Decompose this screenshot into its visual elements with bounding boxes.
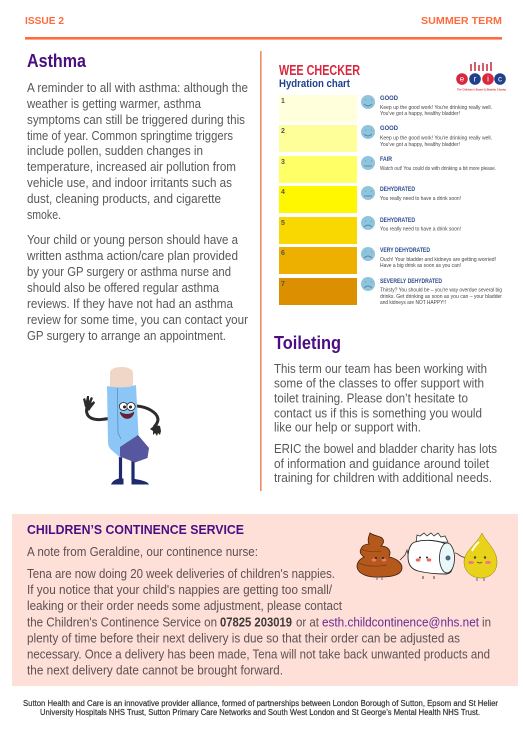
chart row 5: DEHYDRATED	[380, 217, 415, 224]
text block: toileting support: some of the classes to offer support with	[274, 376, 484, 390]
text block: tena deliveries: in	[482, 616, 491, 630]
chart row 1: You've got a happy, healthy bladder!	[380, 111, 460, 117]
text block: eric charity	[274, 442, 497, 485]
text block: tena deliveries: or at	[296, 616, 319, 630]
text block: toileting support: toilet training. Please don’t hesitate to	[274, 392, 468, 406]
icon: inhaler character	[83, 367, 161, 484]
text block: asthma action plan: Your child or young person should have a	[27, 233, 238, 247]
text block: tena deliveries: the next delivery date cannot be brought forward.	[27, 664, 283, 678]
text block: tena deliveries: If you notice that your child's nappies are getting too small/	[27, 583, 332, 597]
footer text	[23, 699, 498, 717]
text block: tena deliveries: the Children's Continence Service on	[27, 616, 217, 630]
text block: asthma reminder: A reminder to all with asthma: although the	[27, 81, 248, 95]
icon: urine drop character	[464, 533, 497, 581]
panel: toileting	[274, 333, 497, 485]
chart row 4: You really need to have a drink soon!	[380, 196, 461, 202]
icon: eric logo: i	[487, 74, 489, 84]
footer text: University Hospitals NHS Trust, Sutton Primary Care Networks and South West London and St George’s Mental Health NHS Trust.	[40, 708, 480, 717]
text block: eric charity: ERIC the bowel and bladder charity has lots	[274, 442, 497, 456]
chart row 7: 7	[281, 281, 285, 288]
text block: asthma reminder: vehicle use, and indoor irritants such as	[27, 176, 232, 190]
icon: poo character	[357, 533, 408, 580]
chart row 2: Keep up the good work! You're drinking really well.	[380, 136, 492, 142]
chart row 4: DEHYDRATED	[380, 186, 415, 193]
text block: tena deliveries: esth.childcontinence@nhs.net	[322, 616, 479, 630]
icon: eric logo: r	[474, 74, 477, 84]
chart row 3: FAIR	[380, 156, 392, 163]
text block: tena deliveries: necessary. Once a delivery has been made, Tena will not take back unwanted products and	[27, 648, 490, 662]
header	[25, 16, 502, 40]
chart row 1: GOOD	[380, 95, 398, 102]
chart row 3	[279, 156, 496, 183]
icon: eric logo	[456, 62, 506, 92]
text block: asthma action plan: by your GP surgery or asthma nurse and	[27, 265, 231, 279]
panel: children's continence service	[12, 514, 518, 686]
icon: eric logo: The Children's Bowel & Bladder Charity	[457, 88, 506, 92]
chart row 6: Have a big drink as soon as you can!	[380, 263, 461, 269]
footer text: Sutton Health and Care is an innovative provider alliance, formed of partnerships between London Borough of Sutton, Epsom and St Helier	[23, 699, 498, 708]
text block: tena deliveries: plenty of time before their next delivery is due so that their order can be adjusted as	[27, 632, 460, 646]
text block: tena deliveries: 07825 203019	[220, 616, 292, 630]
text block: tena deliveries	[27, 567, 491, 678]
chart row 6: Ouch! Your bladder and kidneys are getting worried!	[380, 257, 496, 263]
icon: eric logo: c	[498, 74, 502, 84]
chart row 7: SEVERELY DEHYDRATED	[380, 278, 442, 285]
chart row 6: 6	[281, 250, 285, 257]
chart title	[279, 63, 360, 90]
chart row 2	[279, 125, 492, 152]
chart row 3: 3	[281, 159, 285, 166]
heading: continence service: CHILDREN’S CONTINENCE SERVICE	[27, 522, 244, 537]
text block: asthma reminder: dust, cleaning products, and cigarette	[27, 192, 221, 206]
header: ISSUE 2	[25, 16, 64, 27]
chart row 7: Thirsty? You should be – you're way overdue several big	[380, 288, 502, 294]
chart row 2: GOOD	[380, 125, 398, 132]
text block: asthma action plan	[26, 233, 248, 343]
text block: asthma action plan: GP surgery to arrange an appointment.	[27, 329, 226, 343]
panel: asthma	[26, 51, 248, 484]
text block: asthma reminder	[26, 81, 248, 222]
text block: asthma action plan: review for some time, you can contact your	[27, 313, 248, 327]
text block: note from nurse: A note from Geraldine, our continence nurse:	[27, 545, 258, 559]
chart row 6	[279, 247, 496, 274]
heading: asthma: Asthma	[27, 51, 87, 71]
chart row 4	[279, 186, 461, 213]
text block: tena deliveries: leaking or their order needs some adjustment, please contact	[27, 599, 342, 613]
chart title: WEE CHECKER	[279, 63, 360, 79]
text block: asthma reminder: time of year. Common springtime triggers	[27, 129, 233, 143]
chart row 2: You've got a happy, healthy bladder!	[380, 142, 460, 148]
chart row 7: drinks. Get drinking as soon as you can – your bladder	[380, 294, 502, 300]
chart row 7: and kidneys are NOT HAPPY!!	[380, 300, 446, 306]
chart row 2: 2	[281, 128, 285, 135]
chart row 5: You really need to have a drink soon!	[380, 226, 461, 232]
heading: toileting: Toileting	[274, 333, 341, 353]
chart row 5	[279, 216, 461, 244]
text block: tena deliveries: Tena are now doing 20 week deliveries of children's nappies.	[27, 567, 335, 581]
icon: toilet roll character	[408, 533, 466, 579]
chart row 3: Watch out! You could do with drinking a bit more please.	[380, 166, 496, 172]
text block: eric charity: training for children with additional needs.	[274, 471, 492, 485]
text block: asthma reminder: weather is getting warmer, asthma	[26, 97, 201, 111]
text block: asthma reminder: symptoms can still be triggered during this	[27, 113, 245, 127]
chart row 1: Keep up the good work! You're drinking really well.	[380, 105, 492, 111]
text block: asthma reminder: smoke.	[27, 208, 61, 222]
chart row 6: VERY DEHYDRATED	[380, 247, 430, 254]
icon: eric logo: e	[460, 74, 465, 84]
chart row 1: 1	[281, 98, 285, 105]
text block: toileting support: contact us if this is something you would	[274, 406, 482, 420]
text block: asthma action plan: reviews. If they have not had an asthma	[27, 297, 233, 311]
text block: eric charity: of information and guidance around toilet	[274, 457, 489, 471]
chart title: Hydration chart	[279, 78, 350, 90]
chart row 1	[279, 95, 492, 122]
header: SUMMER TERM	[421, 16, 502, 27]
text block: asthma action plan: written asthma action/care plan provided	[26, 249, 238, 263]
chart row 4: 4	[281, 189, 285, 196]
chart: wee checker hydration chart	[279, 62, 506, 306]
text block: asthma action plan: should also be offered regular asthma	[27, 281, 219, 295]
text block: toileting support: This term our team has been working with	[274, 362, 487, 376]
text block: asthma reminder: include pollen, sudden changes in	[27, 144, 203, 158]
chart row 5: 5	[281, 220, 285, 227]
chart row 7	[279, 277, 502, 306]
text block: asthma reminder: temperature, increased air pollution from	[27, 160, 236, 174]
text block: toileting support: like our help or support with.	[274, 420, 421, 434]
text block: toileting support	[274, 362, 487, 434]
